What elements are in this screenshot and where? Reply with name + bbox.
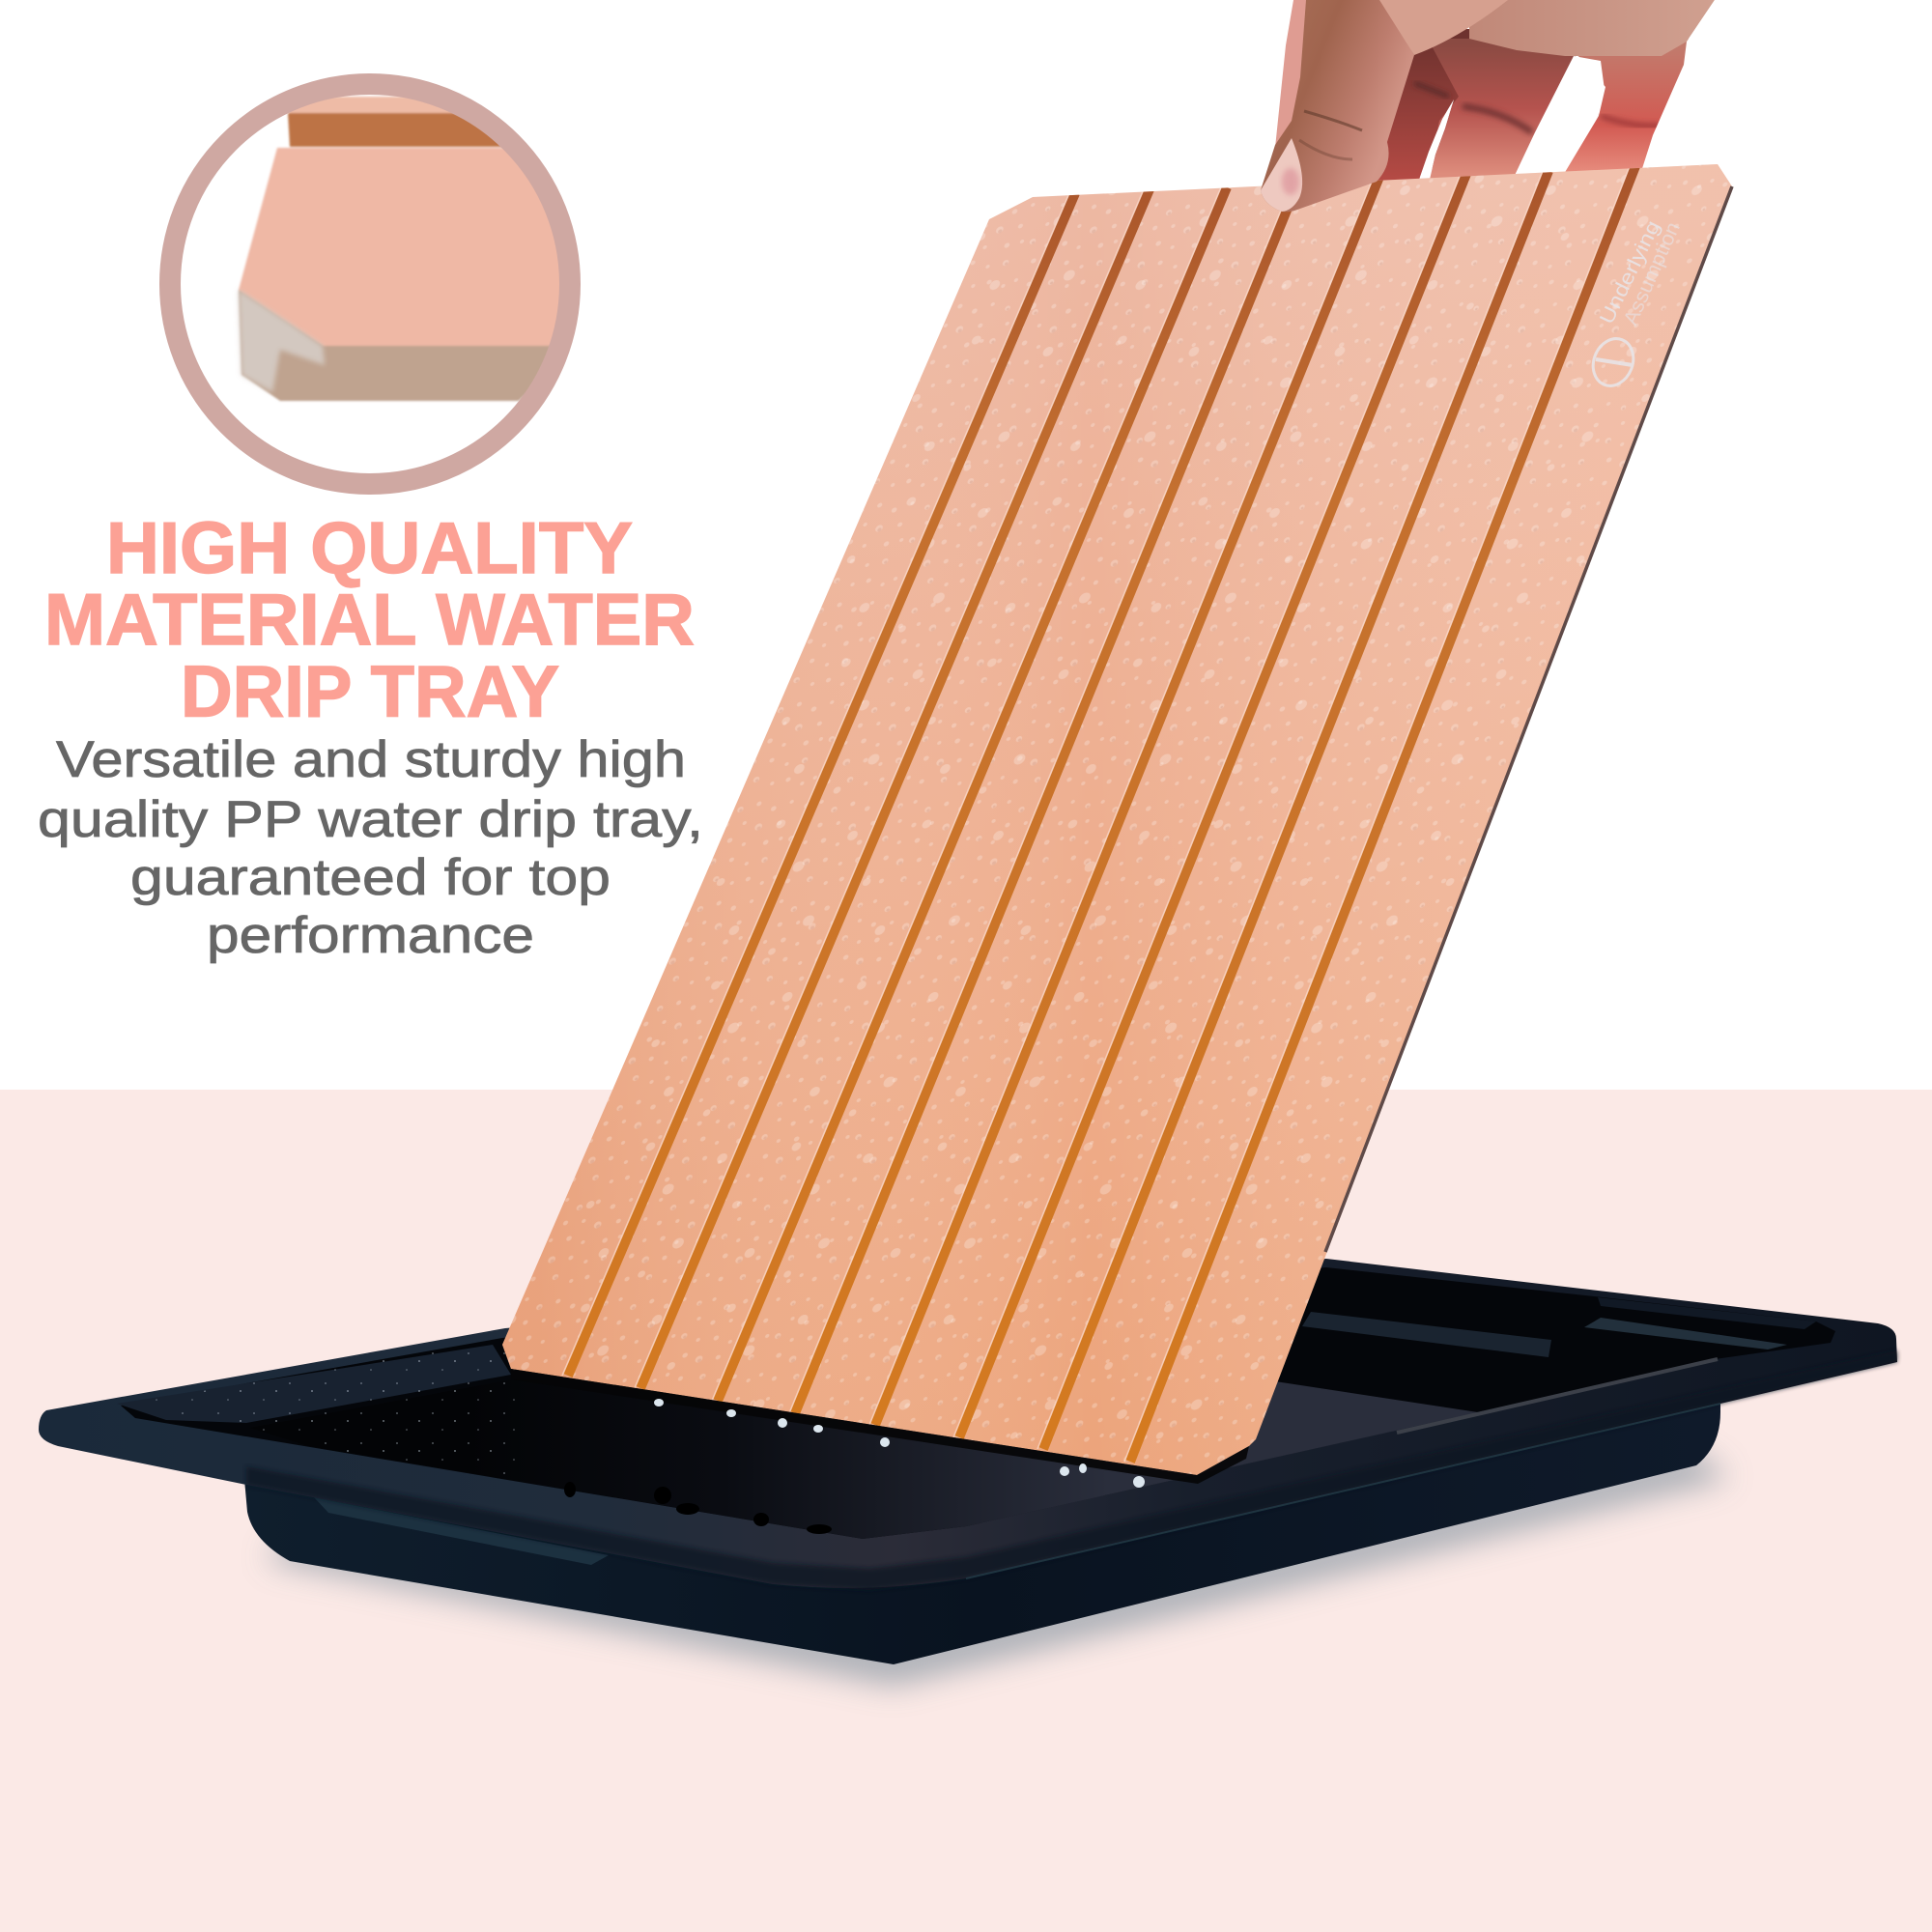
thumb creases — [1304, 111, 1362, 130]
heading — [44, 507, 695, 732]
knuckle — [1377, 0, 1508, 55]
brand name text: Underlying — [1596, 217, 1664, 327]
right channel strip — [1584, 1318, 1787, 1350]
rim front shade — [246, 1350, 1897, 1590]
board grooves — [568, 166, 1635, 1462]
brand name text: Assumption — [1620, 219, 1685, 328]
description text: quality PP water drip tray, — [38, 791, 703, 848]
finger creases — [1414, 83, 1449, 97]
finger four — [1565, 39, 1689, 172]
water board with grooves — [483, 155, 1739, 1488]
callout: zoomed corner detail circle — [170, 84, 580, 484]
tray basin opening — [121, 1267, 1835, 1539]
description text: guaranteed for top — [130, 849, 611, 906]
right ledge strip — [1302, 1312, 1551, 1357]
description text: performance — [207, 907, 534, 964]
finger two — [1378, 29, 1469, 181]
tray rim — [39, 1259, 1897, 1588]
tray shadow on surface — [266, 1449, 1729, 1686]
dark shadow and drips along board bottom edge — [511, 1369, 1249, 1488]
board colour sheen — [502, 164, 1732, 1475]
brand logo on board — [1586, 217, 1685, 392]
rim lower lip highlight — [966, 1404, 1720, 1578]
water beads on tray floor — [564, 1482, 832, 1534]
brand name text — [1596, 217, 1685, 328]
board right dark edge — [1325, 186, 1732, 1252]
finger three — [1430, 39, 1576, 178]
right rim textured highlight — [1397, 1359, 1718, 1433]
right rim top surface — [1598, 1297, 1816, 1329]
thumb nail — [1261, 138, 1302, 212]
back of hand — [1469, 0, 1715, 56]
left channel highlight — [117, 1345, 511, 1423]
tray tub body — [243, 1381, 1720, 1664]
tub side handle — [314, 1497, 609, 1565]
water speckles on left basin — [156, 1352, 515, 1474]
background: pink lower panel — [0, 1090, 1932, 1932]
tray floor — [249, 1379, 1478, 1539]
heading: HIGH QUALITY — [106, 507, 633, 588]
description text: Versatile and sturdy high — [56, 731, 686, 788]
description text — [38, 731, 703, 964]
hand fingers behind board — [1262, 0, 1715, 185]
heading: MATERIAL WATER — [44, 579, 695, 660]
heading: DRIP TRAY — [181, 651, 559, 732]
ring around detail circle — [170, 84, 570, 484]
hand thumb and knuckle — [1261, 0, 1508, 212]
board top face — [502, 164, 1732, 1475]
groove light edges — [562, 166, 1630, 1462]
background: white upper area — [0, 0, 1932, 1090]
detail photo of tray corner — [239, 97, 580, 401]
black drip tray — [39, 1259, 1897, 1664]
water droplets on board — [483, 155, 1739, 1488]
pink palm sliver — [1262, 0, 1306, 185]
thumb — [1261, 0, 1414, 212]
